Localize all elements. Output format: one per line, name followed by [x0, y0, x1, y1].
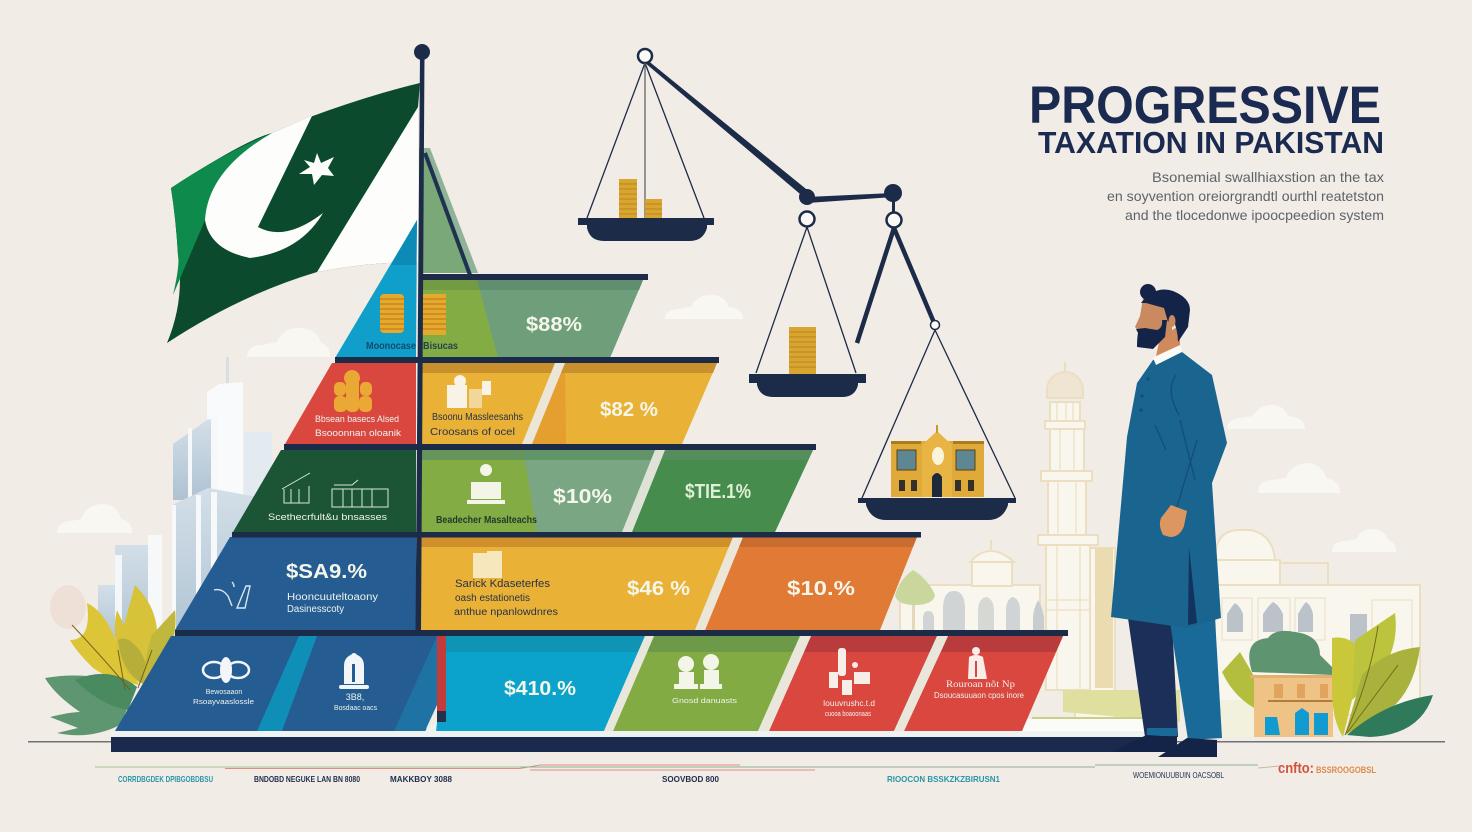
tier 1 right: green panel: $88%: [526, 314, 582, 336]
tier 3: [233, 450, 813, 532]
tier 4 right: yellow and orange: oash estationetis: [455, 593, 530, 604]
flag of Pakistan: [167, 83, 420, 343]
ground line: [28, 741, 1445, 742]
right pan with building: [858, 330, 1016, 520]
footer labels: SOOVBOD 800: [662, 774, 719, 784]
tier 4: [175, 537, 917, 630]
tier 5 panel: red middle: cuooa boaoonaas: [825, 709, 871, 718]
title: [1029, 76, 1384, 160]
title: TAXATION IN PAKISTAN: [1038, 125, 1384, 160]
tier 4 left: blue: [175, 537, 416, 630]
footer labels: [118, 760, 1376, 784]
collar: [1153, 345, 1182, 365]
tier 5 panel: red right: Dsoucasuuaon cpos inore: [934, 691, 1025, 700]
footer labels: RIOOCON BSSKZKZBIRUSN1: [887, 774, 1000, 784]
description: [1107, 169, 1384, 223]
tier 5 panel: olive: [613, 636, 800, 731]
tier 5 panel: blue: Rsoayvaaslossle: [193, 699, 254, 706]
tier 1 left: blue triangle: Moonocase: [366, 341, 416, 352]
shoes: [1112, 735, 1217, 757]
tier 2 right: yellow: Bsoonu Massleesanhs: [432, 412, 523, 423]
tier 5 panel: olive: Gnosd danuasts: [672, 696, 737, 705]
title: PROGRESSIVE: [1029, 76, 1381, 135]
man in kurta: [1111, 284, 1227, 757]
ground patch: [1022, 690, 1255, 737]
middle pan with coins: [749, 227, 866, 397]
footer labels: MAKKBOY 3088: [390, 774, 452, 784]
tier 2 right: yellow: $82 %: [600, 399, 658, 421]
clouds: [57, 295, 1396, 552]
tier 4 right: yellow and orange: Sarick Kdaseterfes: [455, 578, 551, 590]
kurta: [1111, 352, 1227, 628]
timeline lines: [95, 765, 1280, 770]
balance scale: [578, 49, 1016, 520]
skyline: right palace and minaret: [900, 362, 1420, 718]
description: en soyvention oreiorgrandtl ourthl reatetston: [1107, 188, 1384, 204]
tier 5: [115, 636, 1063, 731]
right foliage and small house: [1222, 613, 1433, 737]
tier 3 right: green panels: $TIE.1%: [685, 481, 751, 503]
footer labels: WOEMIONUUBUIN OACSOBL: [1133, 770, 1224, 780]
tier 4 right: yellow and orange: $46 %: [627, 578, 690, 600]
tier 3 left: dark green: Scethecrfult&u bnsasses: [268, 512, 388, 522]
footer labels: BNDOBD NEGUKE LAN BN 8080: [254, 774, 360, 784]
ear: [1168, 315, 1176, 327]
left pan with coins: [578, 63, 714, 241]
tier 1: [335, 220, 643, 358]
tier 5 panel: blue: Bosdaac oacs: [334, 703, 377, 712]
base platform: [111, 731, 1161, 752]
tier 5 panel: red right: [904, 636, 1063, 731]
tier 5 panel: blue: 3B8,: [346, 692, 364, 702]
trousers: [1128, 618, 1222, 740]
tier 4 left: blue: $SA9.%: [286, 561, 367, 583]
tier 5 panel: cyan: $410.%: [504, 678, 576, 700]
tier 3 right: green panels: Beadecher Masalteachs: [436, 515, 537, 526]
palace windows: [923, 591, 1367, 660]
tier 1 right: green panel: [421, 280, 643, 358]
tier 2: [285, 363, 717, 444]
top triangle behind pole: [419, 148, 478, 275]
tier 4 left: blue: Hooncuuteltoaony: [287, 592, 378, 603]
beard: [1136, 320, 1167, 349]
tier 2 left: red: Bbsean basecs Alsed: [315, 414, 399, 424]
tier 5 panel: blue: Bewosaaon: [206, 689, 242, 696]
tier 5 panel: red middle: [769, 636, 937, 731]
neck: [1156, 325, 1180, 356]
tier 4 right: yellow and orange: $10.%: [787, 578, 855, 600]
footer labels: CORRDBGDEK DPIBGOBDBSU: [118, 774, 213, 784]
tier 5 panel: red middle: Iouuvrushc.t.d: [823, 699, 875, 708]
description: Bsonemial swallhiaxstion an the tax: [1152, 169, 1384, 185]
left foliage: [45, 585, 176, 735]
description: and the tlocedonwe ipoocpeedion system: [1125, 207, 1384, 223]
hair: [1140, 284, 1190, 342]
right arm: [857, 228, 940, 343]
footer labels: BSSROOGOBSL: [1316, 765, 1376, 775]
flag pole: [414, 44, 430, 630]
hand: [1160, 505, 1187, 537]
tier 3 right: green panels: [421, 450, 813, 532]
tier 2 left: red: [285, 363, 416, 444]
tier 1 right: green panel: Bisucas: [423, 341, 458, 352]
face: [1135, 298, 1172, 338]
tier 5 panel: blue: [115, 636, 437, 731]
skyline: left towers: [98, 357, 272, 650]
tier 5 panel: cyan: [436, 636, 645, 731]
kurta details: [1140, 375, 1197, 625]
tier 4 right: yellow and orange: anthue npanlowdnres: [454, 607, 558, 618]
tier 5 separators: [425, 636, 948, 731]
footer labels: cnfto:: [1278, 760, 1314, 777]
right leaves: [1332, 613, 1433, 737]
tier 3 right: green panels: $10%: [553, 486, 612, 508]
tier 2 right: yellow: [421, 363, 717, 444]
tier 2 left: red: Bsooonnan oloanik: [315, 428, 402, 438]
tier 2 right: yellow: Croosans of ocel: [430, 427, 515, 438]
tier 4 right: yellow and orange: [421, 537, 917, 630]
small tree: [895, 570, 935, 636]
tier 3 left: dark green: [233, 450, 416, 532]
tier 4 left: blue: Dasinesscoty: [287, 604, 344, 615]
tier divider bars: [175, 274, 1068, 636]
tier 5 panel: red right: Rouroan nõt Np: [946, 680, 1015, 690]
tier 1 left: blue triangle: [335, 220, 417, 358]
scale beam: [638, 49, 902, 228]
